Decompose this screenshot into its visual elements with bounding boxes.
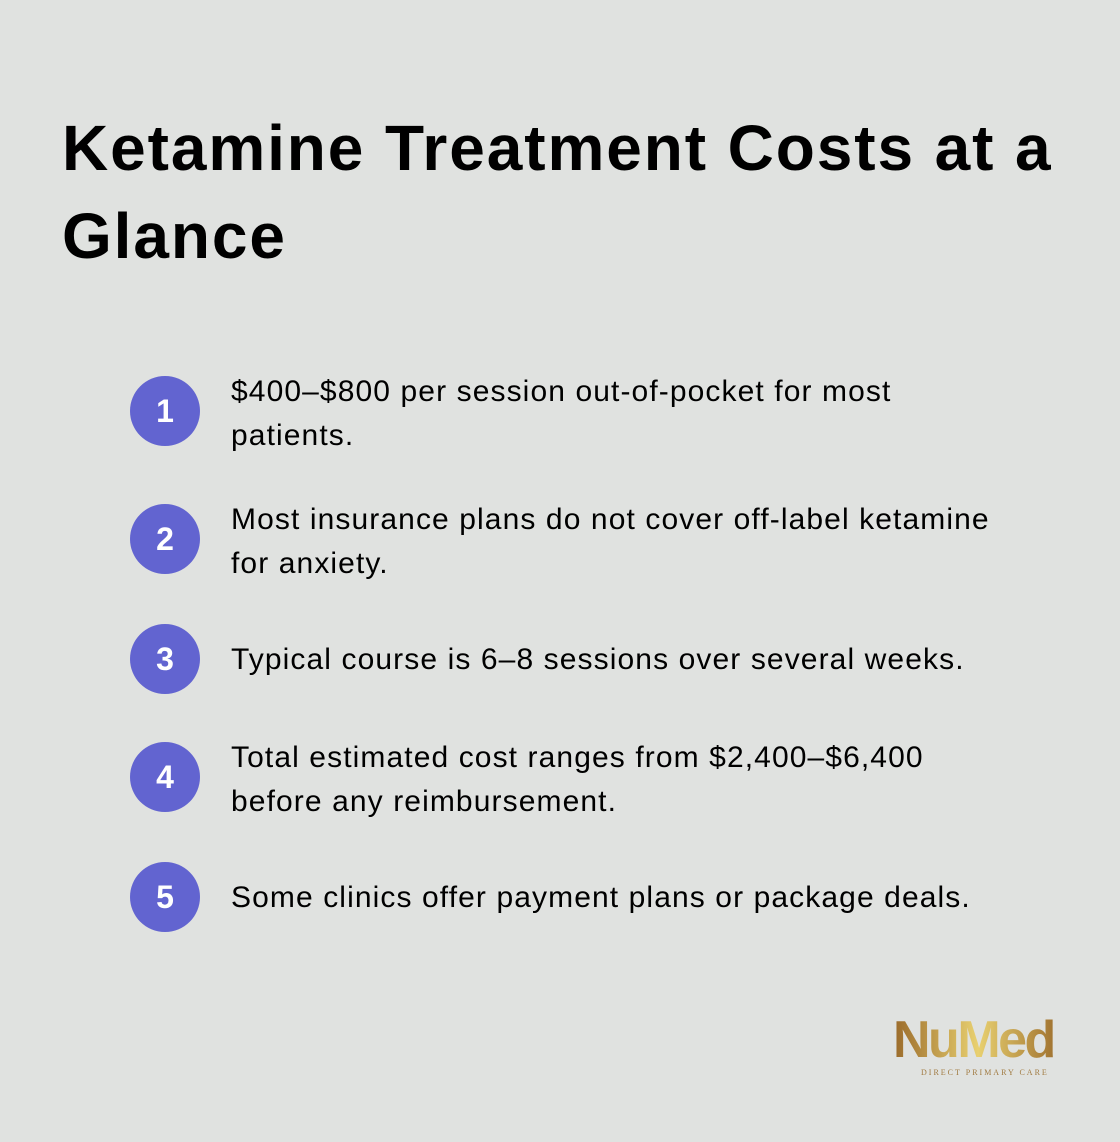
text 1 bbox=[231, 375, 891, 452]
text 1: patients. bbox=[231, 419, 354, 452]
badge 4 bbox=[130, 742, 200, 812]
title: Glance bbox=[62, 200, 287, 272]
badge 2 bbox=[130, 504, 200, 574]
list item 4 bbox=[130, 741, 924, 818]
list item 1 bbox=[130, 375, 891, 452]
text 2: for anxiety. bbox=[231, 547, 389, 580]
badge 1 bbox=[130, 376, 200, 446]
text 4 bbox=[231, 741, 924, 818]
text 2 bbox=[231, 503, 990, 580]
badge 1: 1 bbox=[156, 393, 174, 429]
title: Ketamine Treatment Costs at a bbox=[62, 112, 1053, 184]
text 4: Total estimated cost ranges from $2,400–$6,400 bbox=[231, 741, 924, 774]
text 4: before any reimbursement. bbox=[231, 785, 617, 818]
list item 5 bbox=[130, 862, 971, 932]
list item 2 bbox=[130, 503, 990, 580]
text 2: Most insurance plans do not cover off-label ketamine bbox=[231, 503, 990, 536]
badge 4: 4 bbox=[156, 759, 174, 795]
text 1: $400–$800 per session out-of-pocket for most bbox=[231, 375, 891, 408]
text 3: Typical course is 6–8 sessions over several weeks. bbox=[231, 643, 965, 676]
badge 3 bbox=[130, 624, 200, 694]
badge 2: 2 bbox=[156, 521, 174, 557]
list item 3 bbox=[130, 624, 965, 694]
badge 3: 3 bbox=[156, 641, 174, 677]
badge 5 bbox=[130, 862, 200, 932]
logo: NuMed bbox=[893, 1011, 1054, 1069]
badge 5: 5 bbox=[156, 879, 174, 915]
title bbox=[62, 112, 1053, 272]
text 5: Some clinics offer payment plans or package deals. bbox=[231, 881, 971, 914]
logo: DIRECT PRIMARY CARE bbox=[921, 1068, 1049, 1077]
